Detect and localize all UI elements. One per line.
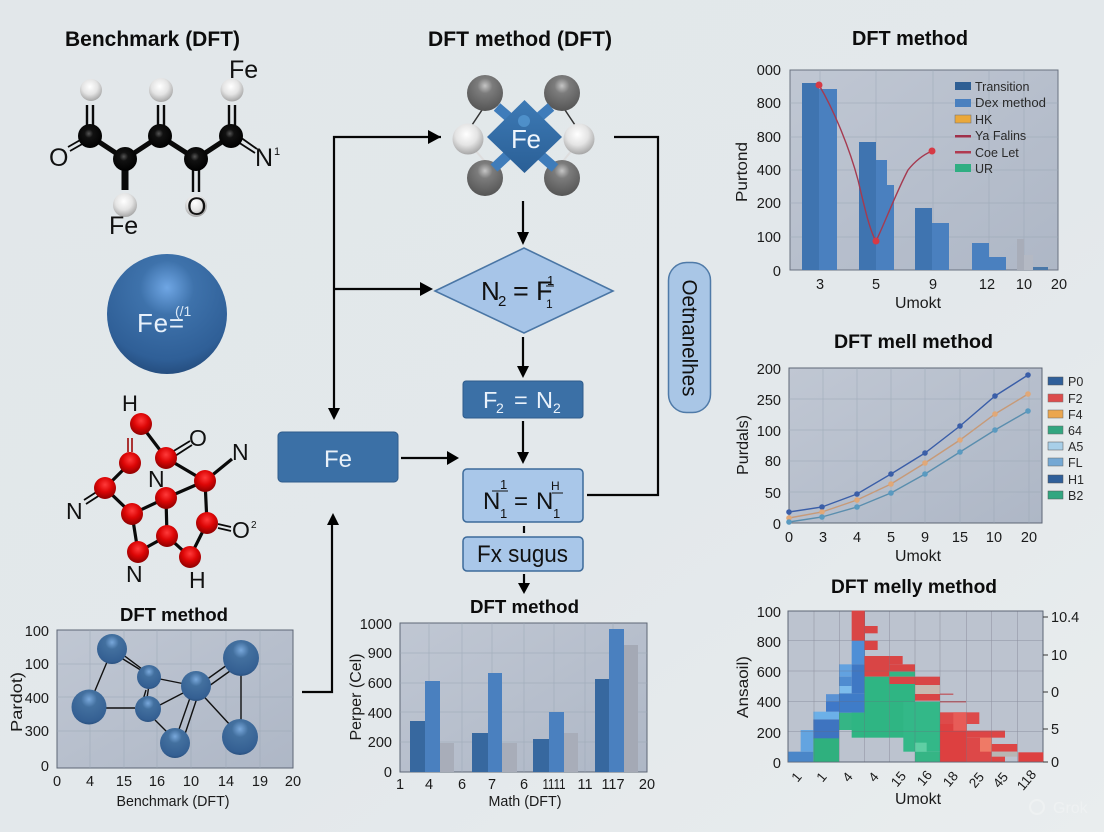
x axis labels: 14 — [218, 774, 234, 790]
decision diamond: N — [481, 276, 500, 306]
molecule: red ring structure: H — [189, 567, 206, 593]
y axis labels: 0 — [384, 765, 392, 781]
decision diamond — [435, 248, 613, 333]
x axis labels: 25 — [966, 770, 987, 791]
x axis labels: 7 — [488, 777, 496, 793]
y axis labels: 100 — [25, 657, 49, 673]
x axis labels: 10 — [986, 530, 1002, 546]
box: N1 = N1: N — [536, 488, 553, 515]
right y axis labels — [1043, 610, 1079, 771]
y axis title: Purdals) — [735, 415, 752, 475]
y axis labels: 900 — [368, 646, 392, 662]
legend: A5 — [1068, 440, 1083, 454]
flow arrows — [302, 130, 658, 692]
box: Fe — [278, 432, 398, 482]
legend: Coe Let — [975, 146, 1019, 160]
box: F2 = N2: N — [536, 387, 553, 413]
y axis labels: 1000 — [360, 617, 392, 633]
title: Benchmark: Benchmark (DFT) — [65, 28, 240, 51]
box: Fx sugus: Fx sugus — [477, 541, 568, 568]
left y axis labels: 0 — [773, 756, 781, 772]
legend: F4 — [1068, 408, 1083, 422]
decision diamond: 1 — [546, 297, 553, 311]
x axis labels: 118 — [1014, 767, 1039, 793]
legend: B2 — [1068, 489, 1083, 503]
x axis labels: 18 — [940, 769, 961, 790]
box: Fx sugus — [463, 537, 583, 571]
molecule: black and white chain — [49, 56, 280, 240]
box: F2 = N2: = — [514, 387, 528, 413]
x axis labels: 15 — [952, 530, 968, 546]
y axis labels — [757, 63, 781, 280]
decision diamond: = — [513, 276, 529, 306]
plot with bars — [400, 623, 647, 772]
chart title: DFT mell method — [834, 332, 993, 353]
y axis labels: 100 — [25, 624, 49, 640]
molecule: black and white chain: N — [255, 144, 273, 172]
molecule: red ring structure: 2 — [251, 520, 257, 531]
x axis labels: 5 — [872, 277, 880, 293]
x axis labels: 4 — [425, 777, 433, 793]
legend: Dex method — [975, 96, 1046, 110]
box: F2 = N2 — [463, 381, 583, 418]
y axis labels: 250 — [757, 393, 781, 409]
x axis labels — [785, 530, 1037, 546]
legend: H1 — [1068, 473, 1084, 487]
x axis labels: 16 — [149, 774, 165, 790]
x axis labels: 20 — [285, 774, 301, 790]
legend: UR — [975, 162, 993, 176]
x axis labels — [788, 767, 1039, 793]
y axis labels: 400 — [757, 163, 781, 179]
x axis labels: 9 — [921, 530, 929, 546]
left y axis labels: 600 — [757, 665, 781, 681]
x axis title: Umokt — [895, 791, 942, 808]
x axis title: Math (DFT) — [488, 794, 562, 810]
y axis labels — [757, 362, 781, 533]
right y axis labels: 10 — [1051, 648, 1067, 664]
plot with bars and line — [790, 70, 1058, 270]
side pill label: Oetnanelhes — [678, 280, 700, 396]
y axis title: Pardot) — [9, 672, 26, 732]
x axis labels: 20 — [639, 777, 655, 793]
right y axis labels: 0 — [1051, 755, 1059, 771]
legend: F2 — [1068, 392, 1083, 406]
Fe centre complex: Fe — [511, 124, 541, 154]
legend — [955, 80, 1046, 176]
x axis labels: 1111 — [542, 777, 566, 793]
x axis labels: 20 — [1021, 530, 1037, 546]
box: N1 = N1: H — [551, 479, 560, 493]
x axis labels: 6 — [458, 777, 466, 793]
y axis labels: 400 — [368, 706, 392, 722]
watermark: Grok — [1053, 800, 1089, 817]
molecule: red ring structure: N — [126, 561, 143, 587]
x axis labels: 6 — [520, 777, 528, 793]
box: N1 = N1: 1 — [500, 506, 507, 521]
y axis labels: 300 — [25, 724, 49, 740]
y axis labels: 80 — [765, 454, 781, 470]
x axis labels: 4 — [839, 769, 856, 785]
y axis labels: 000 — [757, 63, 781, 79]
molecule: red ring structure: N — [232, 439, 249, 465]
x axis labels: 11 — [577, 777, 593, 793]
box: F2 = N2: 2 — [553, 400, 561, 416]
x axis labels: 0 — [785, 530, 793, 546]
x axis labels: 10 — [183, 774, 199, 790]
plot with stacked blocks — [788, 611, 1043, 762]
y axis labels — [25, 624, 49, 775]
x axis title: Umokt — [895, 548, 942, 565]
decision diamond: F — [536, 276, 552, 306]
y axis labels: 800 — [757, 130, 781, 146]
molecule: red ring structure: N — [66, 498, 83, 524]
y axis labels: 100 — [757, 230, 781, 246]
molecule: red ring structure: O — [189, 425, 207, 451]
box: N1 = N1: N — [483, 488, 500, 515]
legend: HK — [975, 113, 993, 127]
y axis title: Purtond — [734, 142, 751, 202]
y axis labels: 200 — [757, 196, 781, 212]
blue Fe sphere — [107, 254, 227, 374]
y axis labels: 400 — [25, 691, 49, 707]
box: N1 = N1: 1 — [553, 506, 560, 521]
chart title: DFT method — [470, 596, 579, 617]
legend: Transition — [975, 80, 1029, 94]
y axis labels: 200 — [757, 362, 781, 378]
molecule: red ring structure: O — [232, 517, 250, 543]
box: N1 = N1 — [463, 469, 583, 522]
left y axis labels: 100 — [757, 605, 781, 621]
box: Fe: Fe — [324, 446, 352, 473]
left y axis labels: 200 — [757, 726, 781, 742]
y axis labels: 0 — [41, 759, 49, 775]
molecule: red ring structure: N — [148, 466, 165, 492]
plot area with atoms — [57, 630, 293, 768]
x axis labels: 3 — [819, 530, 827, 546]
title: centre DFT method: DFT method (DFT) — [428, 28, 612, 51]
left y axis labels: 800 — [757, 635, 781, 651]
plot with lines — [786, 368, 1042, 525]
Fe centre complex — [452, 75, 594, 196]
x axis labels: 4 — [86, 774, 94, 790]
x axis title: Umokt — [895, 295, 942, 312]
molecule: red ring structure — [66, 391, 257, 593]
box: N1 = N1: 1 — [500, 477, 507, 492]
legend: P0 — [1068, 375, 1083, 389]
x axis labels — [396, 777, 655, 793]
right y axis labels: 5 — [1051, 722, 1059, 738]
legend — [1048, 375, 1084, 503]
x axis labels: 16 — [914, 768, 935, 789]
molecule: black and white chain: O — [49, 144, 68, 172]
chart title: DFT melly method — [831, 577, 997, 598]
x axis labels: 0 — [53, 774, 61, 790]
legend: FL — [1068, 456, 1083, 470]
watermark — [1030, 800, 1089, 817]
x axis labels: 117 — [601, 777, 625, 793]
panel: middle right line chart — [735, 332, 1084, 565]
right y axis labels: 10.4 — [1051, 610, 1079, 626]
y axis labels: 600 — [368, 676, 392, 692]
left y axis labels: 400 — [757, 695, 781, 711]
panel: left network chart — [9, 604, 301, 810]
y axis labels: 200 — [368, 735, 392, 751]
box: F2 = N2: F — [483, 387, 497, 413]
panel: bottom right stacked histogram — [735, 577, 1079, 808]
right y axis labels: 0 — [1051, 685, 1059, 701]
decision diamond: 2 — [498, 293, 506, 310]
title: right DFT method: DFT method — [852, 28, 968, 50]
x axis labels: 10 — [1016, 277, 1032, 293]
y axis labels: 100 — [757, 424, 781, 440]
blue Fe sphere: Fe= — [137, 308, 184, 338]
x axis labels: 45 — [990, 770, 1011, 791]
y axis title: Ansaoil) — [735, 656, 752, 718]
left y axis labels — [757, 605, 781, 772]
x axis labels: 12 — [979, 277, 995, 293]
y axis labels: 0 — [773, 517, 781, 533]
x axis title: Benchmark (DFT) — [116, 794, 230, 810]
box: N1 = N1: = — [514, 488, 528, 515]
molecule: black and white chain: 1 — [274, 146, 280, 158]
y axis labels: 800 — [757, 96, 781, 112]
molecule: red ring structure: H — [122, 391, 138, 416]
x axis labels: 1 — [396, 777, 404, 793]
x axis labels: 19 — [252, 774, 268, 790]
molecule: black and white chain: Fe — [109, 212, 138, 240]
chart title: DFT method — [120, 604, 228, 625]
legend: Ya Falins — [975, 129, 1026, 143]
x axis labels: 5 — [887, 530, 895, 546]
y axis labels — [360, 617, 392, 781]
x axis labels: 15 — [116, 774, 132, 790]
box: F2 = N2: 2 — [496, 400, 504, 416]
x axis labels: 15 — [888, 769, 909, 790]
y axis labels: 50 — [765, 486, 781, 502]
decision diamond: 1 — [547, 273, 554, 288]
x axis labels — [53, 774, 301, 790]
panel: centre bar chart — [348, 596, 655, 810]
x axis labels: 1 — [788, 769, 805, 785]
x axis labels: 9 — [929, 277, 937, 293]
x axis labels: 3 — [816, 277, 824, 293]
molecule: black and white chain: Fe — [229, 56, 258, 84]
molecule: black and white chain: O — [187, 193, 206, 221]
x axis labels: 1 — [813, 769, 830, 785]
blue Fe sphere: (/1 — [175, 303, 192, 319]
panel: top right bar and line chart — [734, 63, 1067, 312]
x axis labels: 20 — [1051, 277, 1067, 293]
x axis labels: 4 — [865, 769, 882, 785]
y axis title: Perper (Cel) — [348, 654, 365, 740]
side pill label — [668, 262, 710, 412]
x axis labels — [816, 277, 1067, 293]
x axis labels: 4 — [853, 530, 861, 546]
legend: 64 — [1068, 424, 1082, 438]
y axis labels: 0 — [773, 264, 781, 280]
